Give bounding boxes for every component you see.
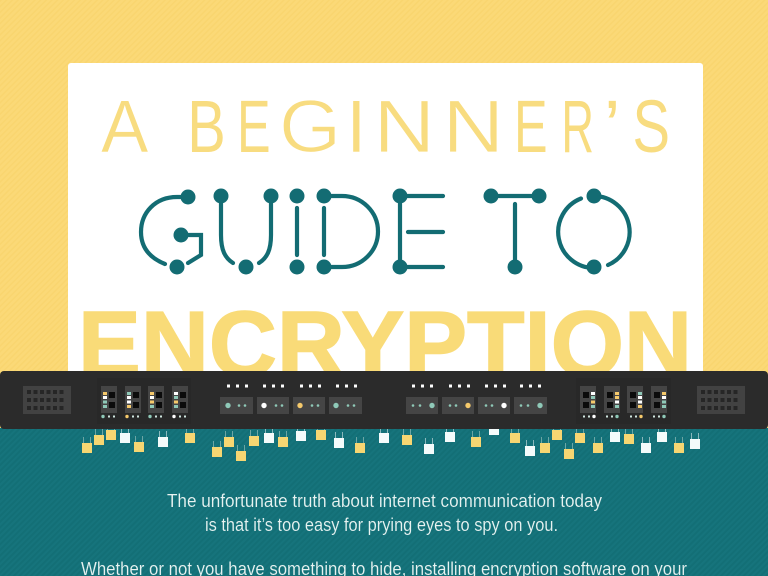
heading: A Beginner's: A bbox=[101, 85, 149, 168]
heading: A Beginner's: N bbox=[443, 85, 504, 168]
heading: A Beginner's: N bbox=[374, 85, 435, 168]
heading: A Beginner's: E bbox=[237, 85, 271, 168]
background: yellow upper area bbox=[0, 0, 768, 372]
letter I bbox=[290, 188, 304, 274]
left grille bbox=[23, 386, 71, 414]
background: teal lower area bbox=[0, 428, 768, 576]
letter O bbox=[558, 188, 630, 274]
letter T bbox=[484, 188, 546, 274]
heading: A Beginner's: R bbox=[561, 85, 594, 168]
right grille bbox=[697, 386, 745, 414]
heading: A Beginner's: E bbox=[514, 85, 548, 168]
letter G bbox=[141, 190, 201, 274]
heading: A Beginner's: S bbox=[632, 85, 670, 168]
server rack bar bbox=[0, 371, 768, 429]
heading: A Beginner's: B bbox=[187, 85, 226, 168]
intro text block: is that it’s too easy for prying eyes to spy on you. bbox=[205, 514, 558, 535]
letter D bbox=[316, 188, 378, 274]
left button group bbox=[220, 384, 362, 414]
letter E bbox=[392, 188, 443, 274]
heading: A Beginner's bbox=[101, 85, 670, 168]
heading: A Beginner's: I bbox=[346, 85, 367, 168]
left switch modules bbox=[97, 378, 191, 424]
intro text block bbox=[81, 490, 687, 576]
padlocks hanging under the server bar bbox=[82, 419, 700, 461]
right button group bbox=[406, 384, 547, 414]
intro text block: The unfortunate truth about internet communication today bbox=[167, 490, 603, 511]
heading: Guide To circuit lettering bbox=[141, 188, 630, 274]
heading: A Beginner's: ’ bbox=[604, 85, 620, 168]
heading: Encryption: ENCRYPTION bbox=[78, 292, 692, 396]
letter U bbox=[214, 188, 278, 274]
panel: white title card bbox=[68, 63, 703, 383]
right switch modules bbox=[576, 378, 671, 424]
heading: A Beginner's: G bbox=[279, 85, 341, 168]
